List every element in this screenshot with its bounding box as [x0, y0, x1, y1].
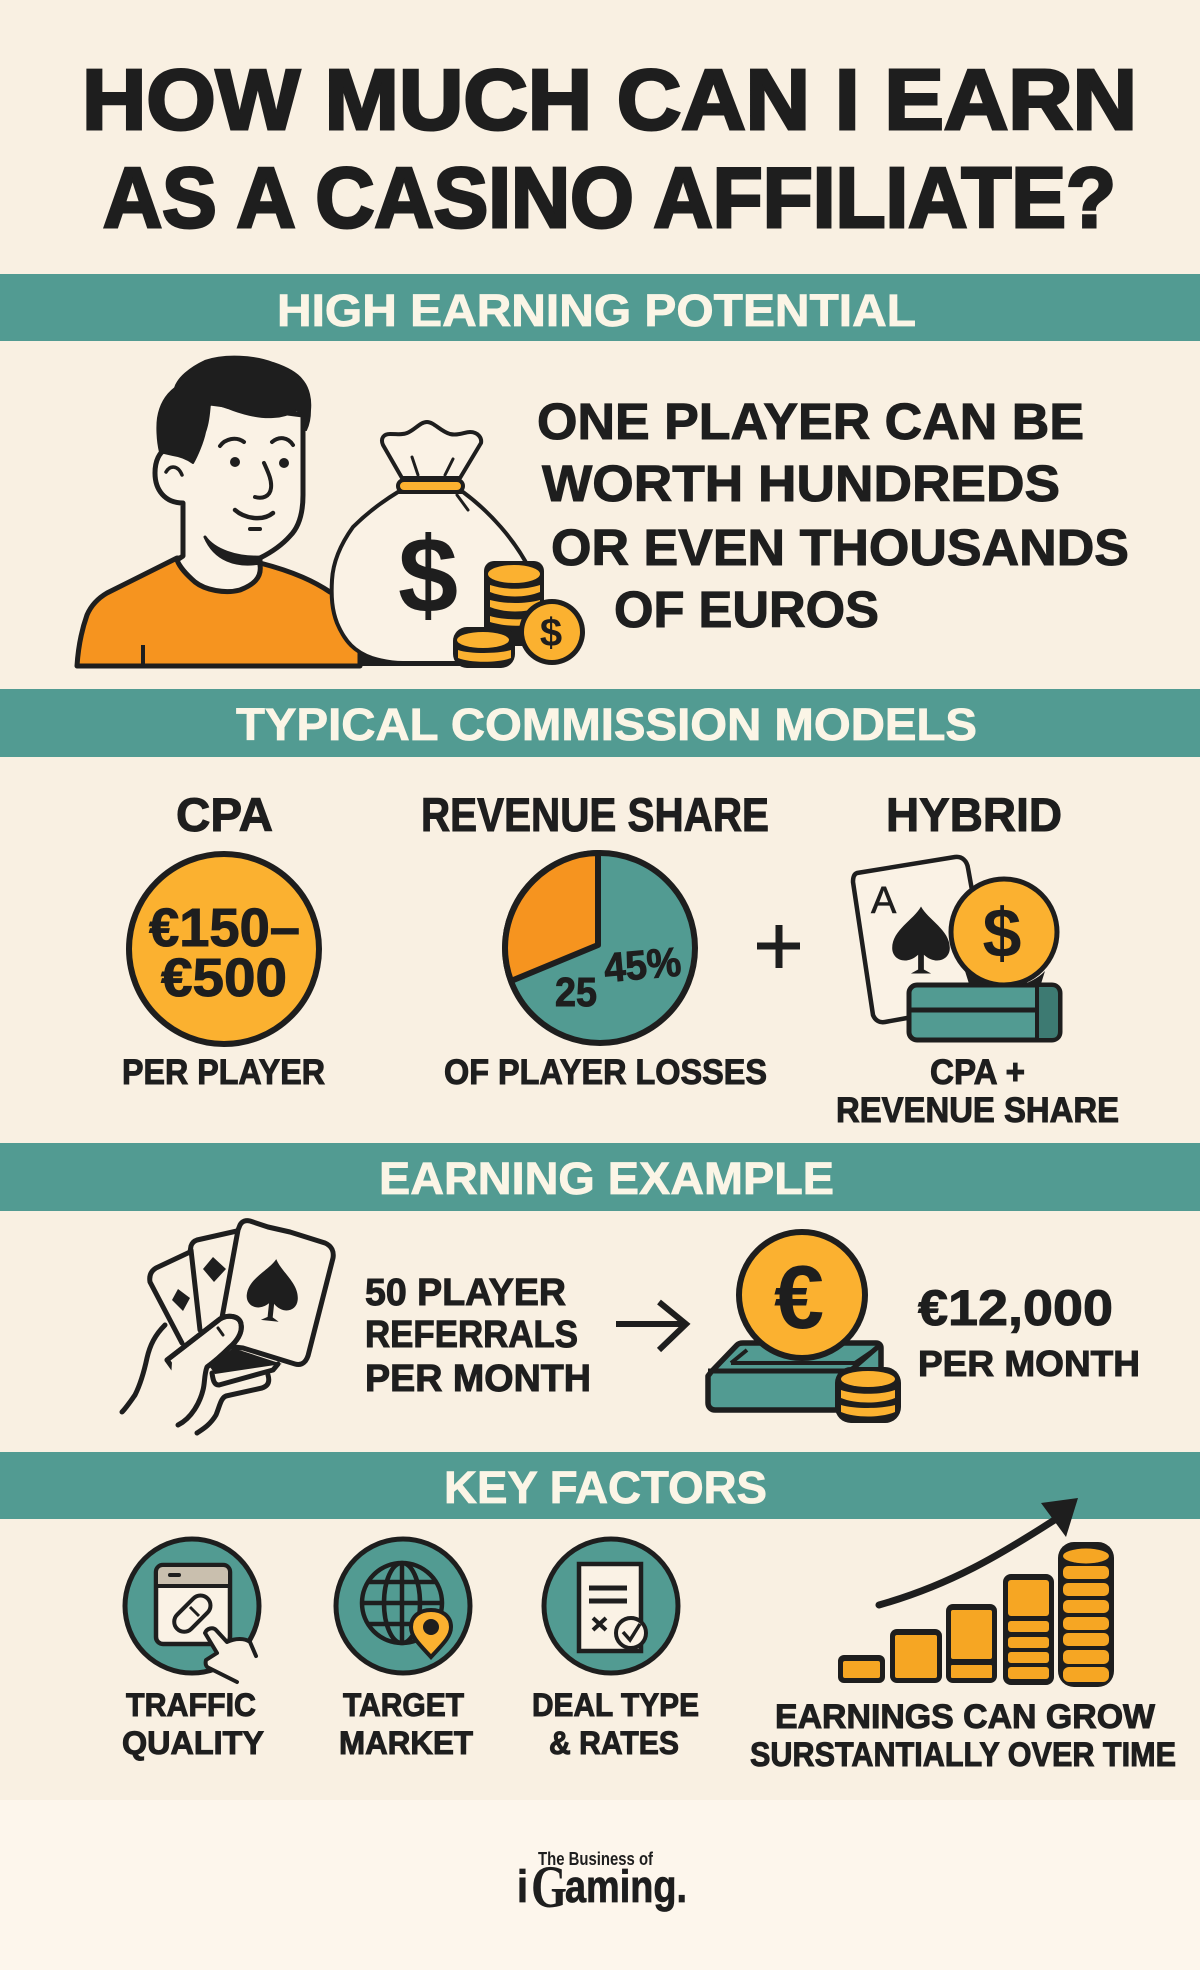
icon: money bag: $ [398, 514, 458, 635]
text: one player can be worth: OR EVEN THOUSANDS [551, 519, 1129, 576]
model: revenue share [421, 788, 769, 1092]
heading: high earning potential [0, 274, 1200, 341]
text: 50 player referrals: 50 PLAYER [365, 1272, 566, 1314]
model: hybrid: A [871, 880, 897, 922]
model: CPA: €500 [161, 948, 287, 1008]
heading: key factors: KEY FACTORS [444, 1462, 767, 1513]
factor: deal type and rates [532, 1539, 699, 1761]
icon: euro coin with cash and coins [708, 1232, 901, 1423]
text: 50 player referrals [365, 1272, 591, 1400]
icon: coins: $ [540, 611, 562, 655]
icon: coins [453, 561, 585, 668]
logo: The Business of iGaming: i [517, 1861, 528, 1912]
heading: typical commission models: TYPICAL COMMISSION MODELS [236, 699, 977, 750]
factor: traffic quality: TRAFFIC [126, 1687, 256, 1723]
logo: The Business of iGaming: G [531, 1854, 567, 1920]
text: 50 player referrals: REFERRALS [365, 1314, 578, 1356]
icon: money bag [332, 422, 530, 666]
model: CPA [122, 788, 325, 1092]
text: 12,000 per month: PER MONTH [918, 1343, 1140, 1384]
title [82, 53, 1137, 246]
panel: earning example [0, 1143, 1200, 1433]
model: revenue share: 25 [555, 969, 597, 1015]
factor: deal type and rates: & RATES [549, 1725, 679, 1761]
icon: hand holding cards [122, 1221, 333, 1433]
model: hybrid [836, 788, 1119, 1130]
model: revenue share: REVENUE SHARE [421, 788, 769, 841]
title: HOW MUCH CAN I EARN [82, 53, 1137, 148]
chart: growing coin stacks with arrow [750, 1498, 1176, 1774]
arrow [616, 1302, 686, 1350]
model: hybrid: HYBRID [886, 788, 1062, 841]
heading: earning example [0, 1143, 1200, 1211]
heading: earning example: EARNING EXAMPLE [379, 1153, 834, 1204]
text: 50 player referrals: PER MONTH [365, 1358, 591, 1400]
model: hybrid: $ [983, 894, 1021, 972]
factor: target market: MARKET [339, 1725, 473, 1761]
panel: key factors [0, 1452, 1200, 1774]
logo: The Business of iGaming: The Business of [538, 1849, 654, 1869]
text: 12,000 per month: €12,000 [918, 1280, 1113, 1336]
heading: key factors [0, 1452, 1200, 1519]
text: one player can be worth: WORTH HUNDREDS [542, 455, 1060, 512]
panel: typical commission models [0, 689, 1200, 1130]
model: CPA: CPA [176, 788, 273, 841]
factor: target market [336, 1539, 473, 1761]
factor: traffic quality: QUALITY [122, 1725, 264, 1761]
text: 12,000 per month [918, 1280, 1140, 1384]
logo: The Business of iGaming: aming. [565, 1861, 687, 1912]
icon: euro coin with cash and coins: € [774, 1248, 824, 1348]
factor: traffic quality [122, 1539, 264, 1761]
heading: typical commission models [0, 689, 1200, 757]
chart: growing coin stacks with arrow: EARNINGS CAN GROW [775, 1698, 1156, 1736]
logo: The Business of iGaming [517, 1849, 687, 1920]
model: revenue share: OF PLAYER LOSSES [444, 1053, 767, 1092]
model: hybrid: REVENUE SHARE [836, 1091, 1119, 1130]
text: one player can be worth: OF EUROS [614, 581, 879, 638]
model: CPA: PER PLAYER [122, 1053, 325, 1092]
plus sign [757, 925, 800, 968]
title: AS A CASINO AFFILIATE? [103, 151, 1116, 246]
model: CPA: €150– [149, 898, 300, 958]
icon: man [77, 357, 360, 666]
model: hybrid: CPA + [930, 1053, 1025, 1092]
heading: high earning potential: HIGH EARNING POTENTIAL [277, 285, 916, 336]
text: one player can be worth [537, 393, 1129, 638]
text: one player can be worth: ONE PLAYER CAN BE [537, 393, 1084, 450]
factor: target market: TARGET [343, 1687, 464, 1723]
panel: high earning potential [0, 274, 1200, 668]
factor: deal type and rates: DEAL TYPE [532, 1687, 699, 1723]
model: revenue share: 45% [602, 939, 683, 991]
